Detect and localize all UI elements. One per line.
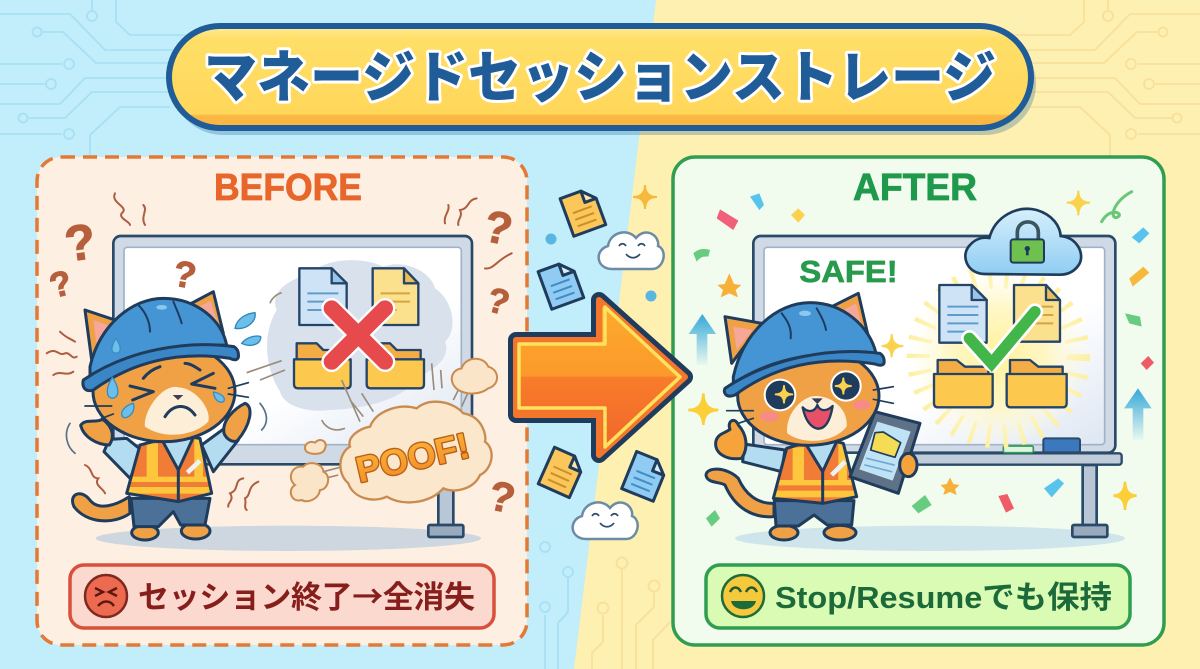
tablet <box>850 412 920 493</box>
question marks: ? <box>61 213 99 273</box>
circuit traces: top left <box>0 0 185 156</box>
heading: after: AFTER <box>853 167 977 209</box>
safety vest <box>123 437 217 502</box>
star eyes <box>765 371 861 410</box>
poof motion lines <box>247 293 470 478</box>
question marks: ? <box>45 263 76 306</box>
big arrow <box>516 300 685 455</box>
safe text: SAFE! <box>799 255 898 289</box>
ears <box>725 293 868 363</box>
doc: blue bottom <box>622 451 668 501</box>
right arm <box>202 403 250 472</box>
arm with thumb up <box>716 420 785 472</box>
ground shadow <box>735 526 1125 551</box>
confetti <box>693 193 1154 527</box>
head <box>738 347 879 445</box>
whiteboard leg <box>1072 465 1107 537</box>
callout: after <box>706 565 1130 628</box>
shirt <box>800 442 840 472</box>
helmet <box>724 303 884 396</box>
safety vest <box>770 442 863 503</box>
feet <box>132 523 210 540</box>
muzzle <box>145 387 209 435</box>
sweat drops <box>235 313 261 345</box>
gray vanish cloud <box>267 260 453 411</box>
tail <box>706 469 774 517</box>
doc: blue top <box>538 260 584 309</box>
whiteboard <box>113 236 472 464</box>
tail <box>73 494 130 521</box>
feet <box>770 525 856 540</box>
callout: before <box>70 565 494 628</box>
middle floating icons <box>538 185 668 539</box>
motion arcs <box>66 403 266 453</box>
small poof puffs <box>291 359 497 501</box>
poof cloud <box>340 402 492 502</box>
pants <box>774 501 854 526</box>
helmet <box>83 298 238 391</box>
crying eyes, brows and mouth <box>85 363 248 418</box>
doc: yellow bottom <box>538 447 586 498</box>
folder: right <box>367 343 424 388</box>
cloud: bottom <box>573 502 638 539</box>
doc: yellow <box>373 268 418 325</box>
whiteboard <box>753 236 1122 465</box>
doc: yellow top <box>560 187 606 236</box>
heading: before: BEFORE <box>214 167 362 209</box>
ground shadow <box>96 526 481 551</box>
sparkles and stars <box>688 191 1137 510</box>
glow behind files <box>908 267 1088 447</box>
dots and sparkle <box>546 185 657 302</box>
question marks: ? <box>485 471 519 522</box>
shirt <box>157 437 197 470</box>
question marks: ? <box>480 200 517 255</box>
up arrows <box>689 314 1152 440</box>
question marks: ? <box>483 280 514 323</box>
cloud: top <box>599 232 664 269</box>
cheeks <box>760 400 870 422</box>
ears <box>85 292 223 360</box>
streamer <box>1102 192 1132 222</box>
icon: angry face <box>85 575 127 617</box>
head <box>93 342 235 442</box>
after illustration <box>688 191 1154 551</box>
doc: blue <box>299 268 347 325</box>
doc: yellow <box>1014 285 1060 342</box>
happy mouth and nose <box>727 387 893 429</box>
cat: after <box>706 293 920 540</box>
title pill <box>169 26 1036 135</box>
callout text: Stop/Resumeでも保持 <box>775 580 1112 615</box>
question marks: ? <box>170 252 199 297</box>
cloud lock <box>965 209 1081 275</box>
callout text: セッション終了→全消失 <box>138 572 475 617</box>
red x <box>332 308 385 362</box>
pants <box>131 498 210 527</box>
question marks <box>45 200 519 522</box>
icon: smiling face <box>722 575 764 617</box>
doc: blue <box>939 285 987 343</box>
folder: left <box>934 360 993 407</box>
folder: right <box>1007 360 1067 407</box>
cat: before <box>73 292 250 540</box>
folder: left <box>294 343 351 388</box>
circuit traces: top right <box>1015 0 1200 156</box>
tears <box>107 338 224 418</box>
circuit traces: bottom centre <box>540 542 670 669</box>
muzzle <box>787 396 847 441</box>
left arm <box>81 419 143 478</box>
squiggles <box>47 193 512 510</box>
before illustration <box>45 193 519 551</box>
poof text: POOF! <box>352 425 473 490</box>
panel: after <box>673 157 1164 645</box>
title text: マネージドセッションストレージ <box>204 33 996 114</box>
wrench badge <box>187 461 200 473</box>
whiteboard leg <box>428 483 463 537</box>
green check <box>969 312 1035 363</box>
panel: before <box>37 157 527 645</box>
